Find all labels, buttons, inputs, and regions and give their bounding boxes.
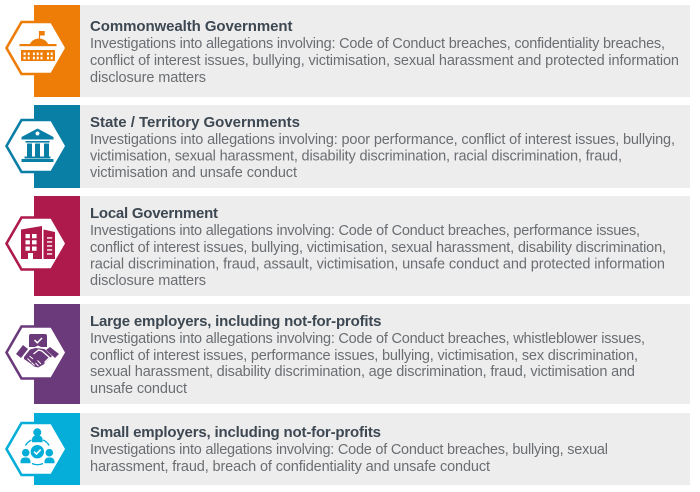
text block: Local Government description: conflict of interest issues, bullying, victimisation, sexual harassment, disability discrimination, — [90, 240, 666, 256]
icon: team circle with checkmark in hexagon — [6, 423, 66, 475]
text block: Small employers description — [90, 442, 608, 475]
panel: Local Government — [6, 196, 690, 296]
panel: Commonwealth Government — [6, 5, 690, 97]
panel: State / Territory Governments — [6, 105, 690, 188]
icon: handshake with checkmark in hexagon — [6, 326, 66, 378]
text block: Large employers description: Investigations into allegations involving: Code of Conduct breaches, whistleblower issues, — [90, 331, 645, 347]
heading: Small employers: Small employers, including not-for-profits — [90, 424, 381, 441]
panel: Large employers — [6, 304, 690, 404]
heading: Large employers: Large employers, including not-for-profits — [90, 313, 382, 330]
text block: Local Government description: racial discrimination, fraud, assault, victimisation, unsafe conduct and protected information — [90, 256, 665, 272]
icon: classical bank building in hexagon — [6, 120, 66, 172]
text block: Commonwealth Government description: disclosure matters — [90, 70, 206, 86]
icon: office buildings in hexagon — [6, 218, 66, 270]
text block: State / Territory Governments description: victimisation and unsafe conduct — [90, 165, 297, 181]
heading: Commonwealth Government: Commonwealth Government — [90, 18, 292, 35]
text block: Small employers description: harassment, fraud, breach of confidentiality and unsafe conduct — [90, 459, 490, 475]
text block: Small employers description: Investigations into allegations involving: Code of Conduct breaches, bullying, sexual — [90, 442, 608, 458]
text block: Commonwealth Government description: conflict of interest issues, bullying, victimisation, sexual harassment and protected information — [90, 53, 679, 69]
icon: capitol building in hexagon — [6, 22, 66, 74]
text block: State / Territory Governments description — [90, 132, 675, 181]
text block: Commonwealth Government description: Investigations into allegations involving: Code of Conduct breaches, confidentiality breaches, — [90, 36, 665, 52]
text block: Large employers description — [90, 331, 645, 397]
text block: Local Government description: Investigations into allegations involving: Code of Conduct breaches, performance issues, — [90, 223, 640, 239]
text block: Large employers description: unsafe conduct — [90, 381, 187, 397]
text block: Large employers description: sexual harassment, disability discrimination, age discrimination, fraud, victimisation and — [90, 364, 635, 380]
text block: State / Territory Governments description: victimisation, sexual harassment, disability discrimination, racial discrimination, fraud, — [90, 148, 622, 164]
heading: Local Government: Local Government — [90, 205, 218, 222]
text block: Local Government description — [90, 223, 666, 289]
panel: Small employers — [6, 413, 690, 485]
heading: State / Territory Governments: State / Territory Governments — [90, 114, 300, 131]
text block: Local Government description: disclosure matters — [90, 273, 206, 289]
text block: Large employers description: conflict of interest issues, performance issues, bullying, victimisation, sex discrimination, — [90, 348, 638, 364]
text block: State / Territory Governments description: Investigations into allegations involving: poor performance, conflict of interest issues, bullying, — [90, 132, 675, 148]
text block: Commonwealth Government description — [90, 36, 679, 86]
